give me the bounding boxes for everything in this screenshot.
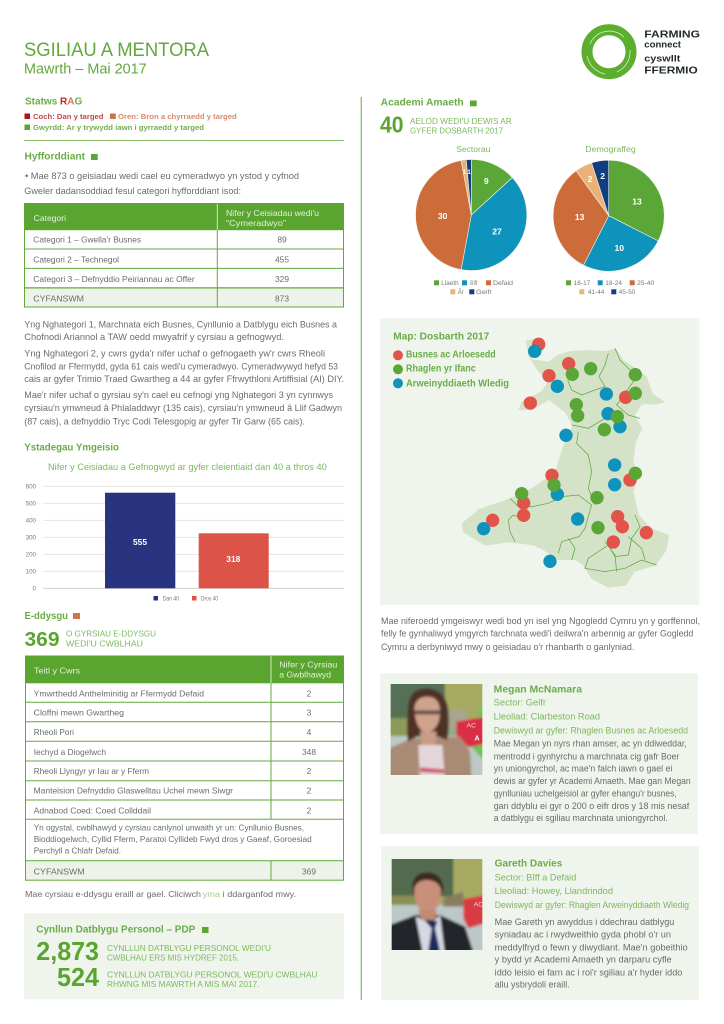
table: e-learning courses: CYFANSWM [34, 866, 85, 876]
panel: Megan McNamara: a datblygu ei sgiliau marchnata uniongyrchol. [494, 813, 668, 823]
bar chart: applications under and over 40: 300 [26, 534, 37, 542]
panel: PDP: 2,873 [36, 936, 99, 966]
table: training categories: Categori 1 – Gwella'r Busnes [33, 235, 141, 245]
table: e-learning courses: 3 [307, 707, 312, 717]
pie chart: Demograffeg: 25-40 [637, 280, 655, 287]
pie chart: Sectorau: Defaid [493, 280, 514, 287]
map title and legend: Arweinyddiaeth Wledig [406, 378, 509, 389]
pie chart: Sectorau [416, 144, 527, 296]
heading: E-ddysgu: E-ddysgu [24, 611, 68, 622]
text block: category commentary: Cnofilod ar Ffermydd, gyda 61 cais wedi'u cymeradwyo. Cymeradwywyd hefyd 53 [24, 362, 338, 372]
pie chart: Demograffeg: Demograffeg [585, 144, 636, 154]
panel: Megan McNamara: Megan McNamara [494, 684, 583, 695]
bar chart: applications under and over 40: Dan 40 [163, 595, 179, 602]
pie chart: Demograffeg: 13 [632, 196, 642, 206]
table: e-learning courses: 2 [307, 786, 312, 796]
panel: RAG status: Statws RAG [25, 97, 83, 108]
text block: map commentary: Mae niferoedd ymgeiswyr wedi bod yn isel yng Ngogledd Cymru yn y gorffennol, [381, 616, 700, 626]
table: e-learning courses: Perchyll a Chlafr Defaid. [34, 846, 121, 856]
table: e-learning courses: Rheoli Pori [34, 727, 74, 737]
text block: map commentary: Cymru a derbyniwyd mwy o geisiadau o'r rhanbarth o ganlyniad. [381, 642, 634, 652]
callout: 369 courses [24, 629, 156, 651]
table: e-learning courses: Teitl y Cwrs [34, 665, 80, 675]
panel: RAG status: Gwyrdd: Ar y trywydd iawn i gyrraedd y targed [33, 123, 204, 132]
panel: PDP: CYNLLUN DATBLYGU PERSONOL WEDI'U [107, 944, 271, 953]
pie chart: Demograffeg: 18-24 [605, 280, 623, 287]
text block: map commentary: felly fe gynhaliwyd ymgyrch farchnata wedi'i deilwra'n arbennig ar gyfer Gogledd [381, 629, 693, 639]
pie chart: Sectorau: 9 [484, 176, 489, 186]
table: e-learning courses: 369 [302, 866, 316, 876]
table: e-learning courses: Nifer y Cyrsiau [279, 660, 338, 670]
panel: PDP: RHWNG MIS MAWRTH A MIS MAI 2017. [107, 980, 260, 989]
panel: Gareth Davies: iddo leisio ei farn ac i roi'r sgiliau a'r hyder iddo [495, 967, 682, 977]
panel: RAG status [24, 97, 237, 132]
table: e-learning courses: Yn ogystal, cwblhawyd y cyrsiau canlynol unwaith yr un: Cynllunio Busnes, [34, 823, 304, 833]
callout: 369 courses: 369 [24, 629, 60, 651]
text block: category commentary: Mae'r nifer uchaf o gyrsiau sy'n cael eu cefnogi yng Nghategori 3 yn cynnwys [24, 390, 333, 400]
panel: PDP: CWBLHAU ERS MIS HYDREF 2015. [107, 954, 239, 963]
pie chart: Sectorau: 27 [492, 226, 502, 236]
map title and legend: Rhaglen yr Ifanc [406, 364, 476, 375]
table: e-learning courses: 2 [307, 688, 312, 698]
table: training categories: 89 [277, 235, 287, 245]
bar chart: applications under and over 40: 0 [33, 586, 37, 592]
photo: Gareth: AC [474, 902, 483, 909]
table: training categories: 873 [275, 294, 289, 304]
logo: Farming Connect: cyswllt [644, 54, 680, 64]
text block: category commentary: Chofnodi Ariannol a TAW oedd mwyafrif y cyrsiau a gefnogwyd. [24, 332, 284, 342]
panel: RAG status: Oren: Bron a chyrraedd y targed [118, 112, 237, 121]
panel: Gareth Davies: Dewiswyd ar gyfer: Rhaglen Arweinyddiaeth Wledig [495, 900, 689, 910]
table: training categories: Categori [34, 213, 66, 223]
bar chart: applications under and over 40 [26, 462, 344, 602]
logo: Farming Connect [587, 29, 700, 76]
photo: Megan [390, 684, 482, 775]
panel: Megan McNamara: yn uniongyrchol, ac mae'n falch iawn o gael ei [494, 764, 672, 774]
title: SGILIAU A MENTORA [24, 39, 209, 61]
text block: more e-learning: Mae cyrsiau e-ddysgu eraill ar gael. Cliciwch [25, 889, 201, 899]
logo: Farming Connect: FFERMIO [644, 64, 698, 76]
pie chart: Sectorau: 30 [438, 211, 448, 221]
panel: Megan McNamara: mentrodd i gynhyrchu a marchnata cig gafr Boer [494, 751, 679, 761]
table: e-learning courses: Ymwrthedd Anthelminitig ar Ffermydd Defaid [34, 688, 204, 698]
pie chart: Sectorau: Sectorau [456, 144, 491, 154]
map markers [477, 338, 653, 568]
title [24, 39, 209, 77]
callout: 40 members: GYFER DOSBARTH 2017 [410, 126, 503, 135]
panel: Gareth Davies: Mae Gareth yn awyddus i ddechrau datblygu [495, 917, 674, 927]
pie chart: Sectorau: Llaeth [441, 280, 459, 287]
table: training categories: “Cymeradwyo” [226, 218, 286, 228]
pie chart: Sectorau: Âr [458, 289, 464, 296]
panel: Gareth Davies: syniadau ac i rwydweithio gyda phobl o'r un [495, 930, 671, 940]
table: e-learning courses: a Gwblhawyd [279, 670, 331, 680]
table: e-learning courses: Adnabod Coed: Coed Collddail [34, 805, 151, 815]
map title and legend [393, 331, 509, 389]
map geography: Wales outline and boundaries [462, 338, 669, 588]
bar chart: applications under and over 40: 555 [133, 537, 147, 547]
panel: Gareth Davies: meddylfryd o fewn y diwydiant. Mae'n gobeithio [495, 943, 688, 953]
panel: PDP: CYNLLUN DATBLYGU PERSONOL WEDI'U CWBLHAU [107, 971, 318, 980]
panel: Megan McNamara: Lleoliad: Clarbeston Road [494, 711, 600, 721]
panel: Gareth Davies: Gareth Davies [495, 859, 563, 870]
panel: PDP: Cynllun Datblygu Personol – PDP [36, 925, 196, 936]
panel: Megan McNamara: Mae Megan yn nyrs rhan amser, ac yn ddiweddar, [494, 739, 687, 749]
panel: Megan McNamara: Dewiswyd ar gyfer: Rhaglen Busnes ac Arloesedd [494, 725, 688, 735]
text block: category commentary: (87 cais), a defnyddio Tryc Codi Telesgopig ar gyfer Tir Garw (65 cais). [24, 416, 305, 426]
panel: PDP: 524 [57, 962, 100, 992]
table: e-learning courses: 2 [307, 766, 312, 776]
panel: Gareth Davies: y bydd yr Academi Amaeth yn darparu cyfle [495, 955, 672, 965]
map title and legend: Map: Dosbarth 2017 [393, 331, 490, 342]
text block: map commentary [381, 616, 700, 652]
callout: 40 members: 40 [380, 112, 404, 138]
pie chart: Demograffeg: 10 [615, 243, 624, 253]
table: e-learning courses: 2 [307, 805, 312, 815]
table: e-learning courses: 348 [302, 747, 316, 757]
table: e-learning courses: Bioddiogelwch, Cyllid Fferm, Paratoi Cyllideb Fwyd dros y Gaeaf, Goroesiad [34, 834, 312, 844]
map title and legend: Busnes ac Arloesedd [406, 349, 496, 360]
panel: Gareth Davies: Sector: Bîff a Defaid [495, 872, 576, 882]
bar chart: applications under and over 40: 400 [26, 518, 37, 524]
panel: map of Wales [380, 318, 699, 605]
title: Mawrth – Mai 2017 [24, 61, 147, 77]
pie chart: Demograffeg [553, 144, 664, 296]
pie chart: Sectorau: 1 [467, 169, 471, 176]
text block: training intro: Gweler dadansoddiad fesul categori hyfforddiant isod: [24, 186, 241, 196]
text block: category commentary: Yng Nghategori 2, y cwrs gyda'r nifer uchaf o gefnogaeth yw'r cwrs Rheoli [24, 349, 325, 359]
panel: Gareth Davies: Lleoliad: Howey, Llandrindod [495, 886, 613, 896]
panel: Gareth Davies [381, 846, 699, 1000]
heading: Academi Amaeth: Academi Amaeth [381, 98, 464, 109]
text block: category commentary: cyrsiau'n ymwneud â Phlaladdwyr (135 cais), cyrsiau'n ymwneud â Llif Gadwyn [24, 403, 342, 413]
text block: category commentary: Yng Nghategori 1, Marchnata eich Busnes, Cynllunio a Datblygu eich Busnes a [24, 320, 338, 330]
table: e-learning courses: Rheoli Llyngyr yr Iau ar y Fferm [34, 766, 149, 776]
callout: 40 members [380, 112, 512, 138]
bar chart: applications under and over 40: 200 [26, 552, 37, 558]
text block: category commentary [24, 320, 344, 426]
table: training categories: 455 [275, 254, 289, 264]
pie chart: Sectorau: 1 [463, 169, 467, 176]
bar chart: applications under and over 40: 500 [26, 500, 37, 508]
table: training categories [24, 204, 344, 307]
table: e-learning courses: 4 [307, 727, 312, 737]
text block: training intro [24, 171, 299, 196]
callout: 40 members: AELOD WEDI'U DEWIS AR [410, 117, 512, 126]
panel: Megan McNamara: gynlluniau uchelgeisiol ar gyfer ehangu'r busnes, [494, 789, 677, 799]
table: e-learning courses: Manteision Defnyddio Glaswelltau Uchel mewn Siwgr [34, 786, 233, 796]
bar chart: applications under and over 40: 318 [226, 554, 241, 564]
logo: Farming Connect: connect [644, 40, 681, 50]
table: training categories: Categori 2 – Technegol [33, 254, 119, 264]
pie chart: Demograffeg: 16-17 [574, 280, 591, 287]
pie chart: Demograffeg: 41-44 [588, 289, 605, 296]
bar chart: applications under and over 40: Nifer y Ceisiadau a Gefnogwyd ar gyfer cleientiaid dan 40 a thros 40 [48, 462, 327, 472]
bar chart: applications under and over 40: Dros 40 [201, 595, 218, 602]
panel: Megan McNamara: Sector: Geifr [494, 698, 546, 708]
column divider [361, 97, 362, 1000]
photo: Megan: AC [467, 722, 476, 729]
panel: Megan McNamara: dewis ar gyfer yr Academi Amaeth. Mae gan Megan [494, 776, 691, 786]
table: e-learning courses: Cloffni mewn Gwartheg [34, 707, 124, 717]
table: e-learning courses: Iechyd a Diogelwch [34, 747, 106, 757]
text block: more e-learning [25, 889, 296, 899]
panel: Gareth Davies: allu ysbrydoli eraill. [495, 979, 570, 989]
callout: 369 courses: O GYRSIAU E-DDYSGU [66, 630, 156, 639]
heading: Hyfforddiant: Hyfforddiant [24, 152, 86, 163]
pie chart: Demograffeg: 2 [588, 174, 593, 184]
text block: more e-learning: i ddarganfod mwy. [223, 889, 296, 899]
bar chart: applications under and over 40: 100 [26, 568, 37, 576]
callout: 369 courses: WEDI'U CWBLHAU [66, 640, 143, 649]
pie chart: Demograffeg: 45-50 [619, 289, 636, 296]
text block: category commentary: cais ar gyfer Trimio Traed Gwartheg a 44 ar gyfer Ffrwythloni Artiffisial (AI) DIY. [24, 374, 344, 384]
text block: more e-learning: yma [203, 889, 220, 899]
panel: RAG status: Coch: Dan y targed [33, 112, 104, 121]
photo: Megan: A [474, 734, 480, 743]
pie chart: Sectorau: Geifr [476, 289, 492, 296]
table: training categories: 329 [275, 274, 289, 284]
photo: Gareth [392, 859, 482, 950]
table: training categories: Categori 3 – Defnyddio Peiriannau ac Offer [33, 274, 195, 284]
panel: Megan McNamara [380, 673, 698, 834]
bar chart: applications under and over 40: 600 [26, 484, 37, 490]
pie chart: Demograffeg: 2 [600, 171, 605, 181]
text block: training intro: • Mae 873 o geisiadau wedi cael eu cymeradwyo yn ystod y cyfnod [25, 171, 299, 181]
table: training categories: Nifer y Ceisiadau wedi'u [226, 208, 319, 218]
panel: Megan McNamara: gan ddyblu ei gyr o 200 o eifr dros y 18 mis nesaf [494, 801, 690, 811]
logo: Farming Connect: FARMING [644, 29, 700, 41]
pie chart: Demograffeg: 13 [575, 212, 585, 222]
heading: Ystadegau Ymgeisio: Ystadegau Ymgeisio [24, 443, 119, 454]
pie chart: Sectorau: Bîff [470, 280, 478, 287]
panel: PDP [24, 913, 344, 999]
table: training categories: CYFANSWM [33, 294, 84, 304]
table: e-learning courses [26, 656, 344, 880]
